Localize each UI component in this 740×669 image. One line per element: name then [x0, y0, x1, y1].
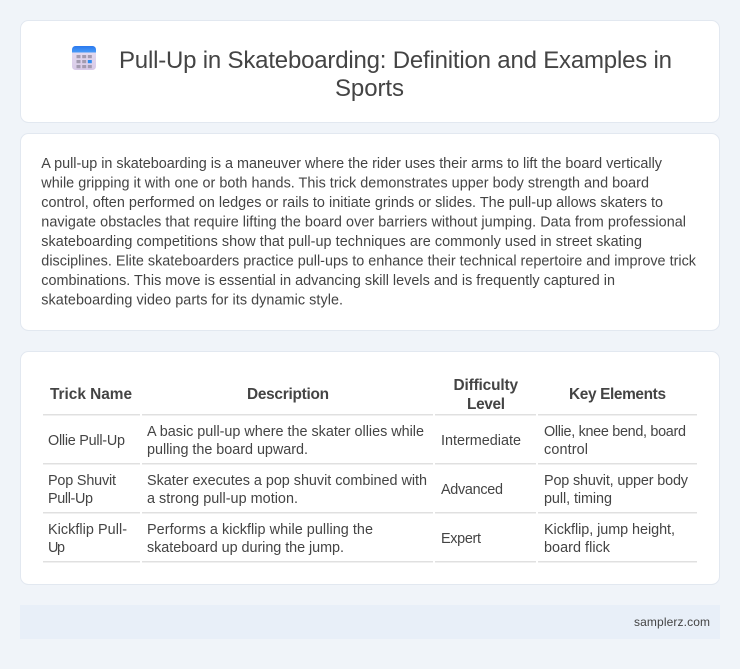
- table header row: Key Elements: [569, 386, 666, 403]
- table row: Ollie Pull-Up: A basic pull-up where the skater ollies while: [147, 424, 424, 440]
- table row: Pop Shuvit Pull-Up: Pop shuvit, upper body: [544, 473, 689, 489]
- table header row: Trick Name: [50, 386, 132, 403]
- table row: Pop Shuvit Pull-Up: Advanced: [441, 482, 503, 498]
- footer source text: samplerz.com: [634, 615, 710, 629]
- table row: Pop Shuvit Pull-Up: [48, 473, 689, 507]
- table row: Pop Shuvit Pull-Up: Pop Shuvit: [48, 473, 116, 489]
- table row: Ollie Pull-Up: Intermediate: [441, 433, 521, 449]
- text block: definition paragraph: combinations. This move is essential in advancing skill levels and is frequently captured in: [41, 273, 615, 289]
- table row: Kickflip Pull-Up: Kickflip, jump height,: [544, 522, 675, 538]
- table row: Kickflip Pull-Up: [48, 522, 675, 556]
- icon: calendar: [72, 46, 96, 70]
- panel: header: [20, 20, 720, 122]
- table row: Ollie Pull-Up: Ollie Pull-Up: [48, 433, 125, 449]
- table row: Ollie Pull-Up: control: [544, 442, 588, 458]
- table row: Kickflip Pull-Up: board flick: [544, 540, 611, 556]
- table row: Ollie Pull-Up: [48, 424, 686, 458]
- text block: definition paragraph: skateboarding competitions show that pull-up techniques are commonly used in street skating: [41, 234, 642, 250]
- table row: Ollie Pull-Up: pulling the board upward.: [147, 442, 308, 458]
- table row: Kickflip Pull-Up: Kickflip Pull-: [48, 522, 127, 538]
- table header row: [50, 377, 666, 413]
- table row: Kickflip Pull-Up: Up: [48, 540, 65, 556]
- table row: Pop Shuvit Pull-Up: Pull-Up: [48, 491, 93, 507]
- text block: definition paragraph: control, often performed on ledges or rails to initiate grinds or slides. The pull-up allows skaters to: [41, 195, 663, 211]
- table row: Kickflip Pull-Up: Expert: [441, 531, 481, 547]
- title: [119, 47, 672, 102]
- text block: definition paragraph: navigate obstacles that require lifting the board over barriers without jumping. Data from professional: [41, 214, 686, 230]
- table header row: Difficulty: [454, 377, 518, 394]
- text block: definition paragraph: skateboarding video parts for its dynamic style.: [41, 292, 343, 308]
- text block: definition paragraph: [40, 156, 697, 308]
- table row: Pop Shuvit Pull-Up: a strong pull-up motion.: [147, 491, 298, 507]
- table row: Pop Shuvit Pull-Up: Skater executes a pop shuvit combined with: [147, 473, 427, 489]
- table header row: Description: [247, 386, 329, 403]
- panel: tricks table: [20, 352, 720, 584]
- table row: Ollie Pull-Up: Ollie, knee bend, board: [544, 424, 686, 440]
- table row: Kickflip Pull-Up: skateboard up during the jump.: [147, 540, 344, 556]
- title: Sports: [335, 75, 404, 102]
- table row: Pop Shuvit Pull-Up: pull, timing: [544, 491, 612, 507]
- text block: definition paragraph: while gripping it with one or both hands. This trick demonstrates upper body strength and board: [40, 176, 649, 192]
- title: Pull-Up in Skateboarding: Definition and Examples in: [119, 47, 672, 74]
- text block: definition paragraph: A pull-up in skateboarding is a maneuver where the rider uses their arms to lift the board vertically: [41, 156, 663, 172]
- table row: Kickflip Pull-Up: Performs a kickflip while pulling the: [147, 522, 373, 538]
- text block: definition paragraph: disciplines. Elite skateboarders practice pull-ups to enhance their technical repertoire and improve trick: [41, 254, 697, 270]
- footer bar: [20, 605, 720, 639]
- panel: intro paragraph: [20, 134, 720, 330]
- table header row: Level: [467, 396, 505, 413]
